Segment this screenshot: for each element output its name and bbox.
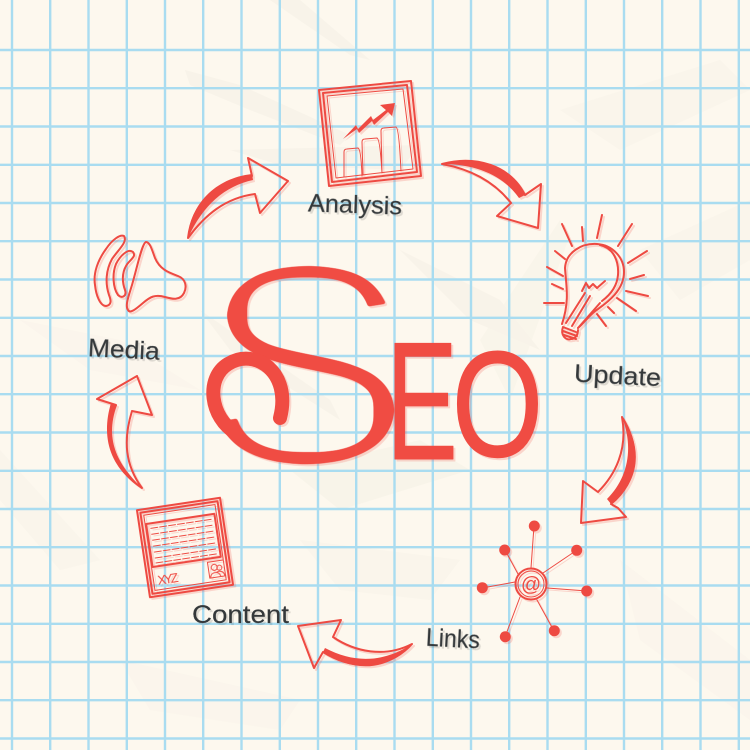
links network icon — [477, 520, 592, 642]
label: Update: Update — [573, 360, 662, 392]
update bulb icon — [544, 215, 648, 339]
label: Content: Content — [192, 601, 289, 629]
S swash flourish — [213, 359, 282, 433]
arrow: update to links — [581, 417, 636, 523]
arrow: analysis to update — [442, 161, 541, 228]
arrow: links to content — [298, 620, 412, 668]
arrow: content to media — [97, 376, 152, 488]
at sign: @ — [521, 574, 541, 596]
XYZ label: XYZ — [156, 570, 179, 588]
SEO title — [197, 201, 543, 528]
content document icon — [137, 498, 233, 597]
media speaker icon — [95, 236, 186, 311]
analysis icon — [319, 81, 421, 186]
arrow: media to analysis — [188, 158, 288, 238]
label: Media: Media — [87, 334, 161, 366]
letter E: E — [386, 307, 458, 495]
label: Analysis: Analysis — [308, 189, 402, 221]
letter S: S — [197, 201, 414, 528]
picture thumbnail — [207, 560, 226, 578]
letter O: O — [452, 320, 543, 488]
label: Links: Links — [425, 624, 481, 654]
